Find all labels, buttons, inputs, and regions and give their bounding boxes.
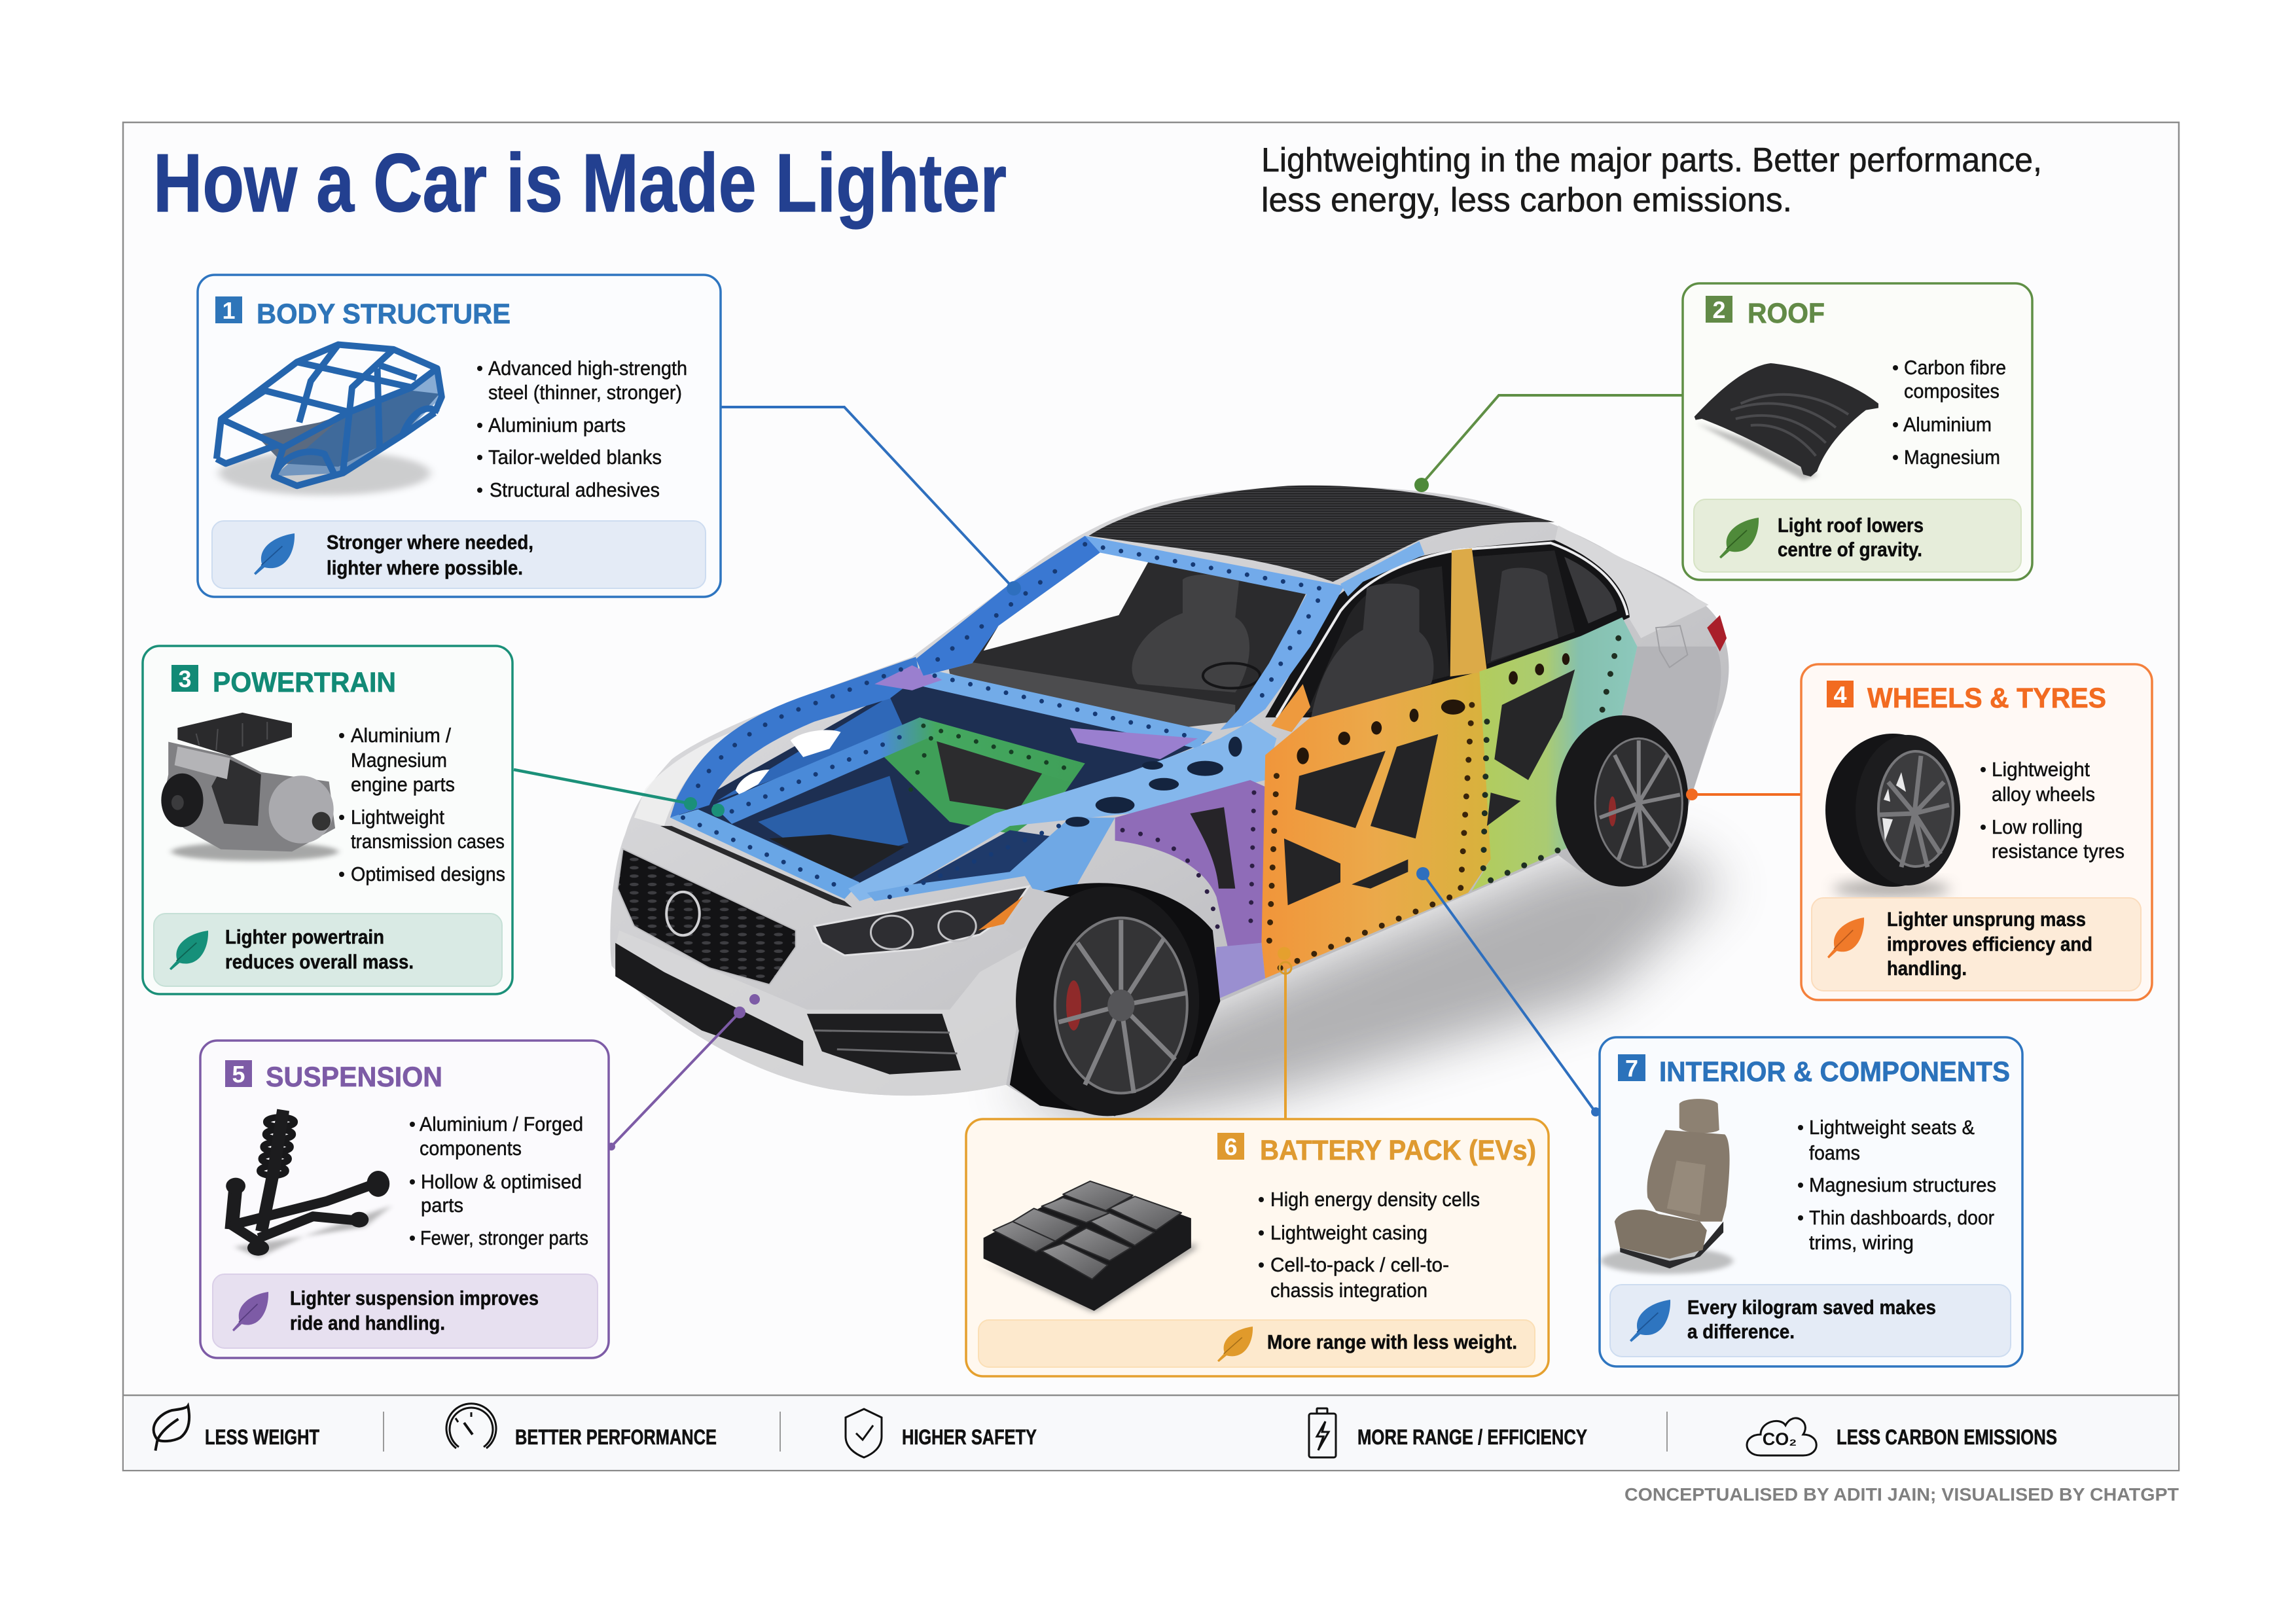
callout text: improves efficiency and [1887, 933, 2092, 955]
front crossmember [670, 810, 859, 899]
side intake [807, 1014, 961, 1075]
badge 6: 6 [1224, 1133, 1238, 1160]
rear quarter shade [1619, 647, 1721, 855]
seat centre panel [1667, 1160, 1706, 1215]
icon: roof panel [1695, 363, 1878, 480]
badge 6 [1217, 1133, 1244, 1160]
bullet list: Lightweight seats & [1809, 1116, 1975, 1139]
bullet list [1798, 1116, 1996, 1254]
badge 2 [1706, 296, 1732, 323]
bullet list [477, 357, 687, 501]
heading: BATTERY PACK (EVs) [1260, 1135, 1536, 1166]
rear door frame [1472, 617, 1637, 891]
bullet list: Aluminium / Forged [420, 1113, 583, 1135]
rear wheel [1556, 715, 1689, 887]
windshield frame [916, 536, 1344, 730]
rear door openings [1487, 669, 1575, 826]
dashboard [948, 661, 1235, 731]
icon: battery [1309, 1408, 1336, 1457]
label: LESS WEIGHT [205, 1425, 319, 1449]
callout text: Lighter unsprung mass [1887, 908, 2086, 931]
connector: wheels [1686, 789, 1801, 800]
label: BETTER PERFORMANCE [515, 1425, 717, 1449]
callout text: ride and handling. [290, 1311, 445, 1334]
icon: leaf [254, 533, 295, 575]
bullet list: Thin dashboards, door [1809, 1206, 1994, 1229]
heading: SUSPENSION [266, 1061, 442, 1093]
cylinder head highlights [175, 747, 230, 779]
bullet list: transmission cases [351, 830, 505, 853]
front fender edge [1006, 889, 1070, 951]
roof weave [1731, 395, 1848, 456]
structure holes [683, 544, 1619, 968]
bullet list: parts [421, 1194, 463, 1217]
strut rod [262, 1110, 283, 1232]
callout text [1778, 514, 1924, 561]
engine block [162, 742, 335, 851]
transmission hub [312, 812, 331, 830]
front tyre [1016, 887, 1199, 1116]
connector: powertrain [514, 770, 725, 817]
bullet list: Tailor-welded blanks [488, 446, 662, 469]
callout text: reduces overall mass. [225, 950, 414, 973]
callout text [1887, 908, 2092, 980]
lower bumper intake [615, 943, 803, 1066]
door beam holes [1297, 653, 1570, 764]
bullet list [1981, 758, 2125, 863]
headlight [814, 887, 1029, 955]
small damper [232, 1186, 236, 1230]
engine cover [177, 713, 292, 756]
green bay panel [882, 717, 1085, 834]
badge 7 [1618, 1054, 1645, 1082]
bullet list: Hollow & optimised [421, 1170, 582, 1193]
callout text: More range with less weight. [1267, 1330, 1517, 1353]
bullet list: Aluminium parts [488, 414, 626, 437]
bullet list: alloy wheels [1992, 783, 2095, 806]
seat shadow [1601, 1248, 1733, 1274]
bullet list: High energy density cells [1270, 1188, 1480, 1211]
frame struts [217, 345, 442, 486]
damper cap [226, 1178, 245, 1194]
purple pillar section [1115, 780, 1269, 947]
front bumper highlight [611, 931, 1032, 1096]
heading: ROOF [1748, 298, 1825, 329]
icon: CO2 cloud: CO₂ [1763, 1429, 1797, 1449]
icon: body frame [217, 345, 442, 495]
panel: roof [1683, 283, 2032, 580]
headlight amber strip [978, 896, 1024, 931]
callout strip [154, 914, 502, 986]
icon: suspension [226, 1110, 392, 1258]
right fender beam [848, 722, 1276, 901]
panel frame [200, 1041, 609, 1358]
callout strip [1610, 1285, 2011, 1357]
callout strip [978, 1320, 1535, 1367]
hood shut line [660, 826, 852, 908]
bullet list: Low rolling [1992, 815, 2083, 838]
control arm [232, 1182, 381, 1242]
pulley hub [171, 795, 184, 810]
callout text: Light roof lowers [1778, 514, 1924, 537]
suspension shadow [234, 1205, 392, 1258]
spokes [1880, 756, 1949, 867]
rim gaps [1882, 772, 1906, 841]
title: How a Car is Made Lighter [153, 137, 1007, 229]
rear door holes [1483, 638, 1619, 880]
callout strip [212, 521, 706, 588]
panel: powertrain [143, 646, 512, 994]
bay opening 2 [736, 770, 770, 794]
grille [618, 849, 796, 984]
icon: seat [1601, 1099, 1733, 1274]
arm bush [350, 1212, 368, 1228]
bullet list: Structural adhesives [490, 478, 660, 501]
battery base [984, 1181, 1191, 1311]
footer divider 2 [780, 1412, 781, 1452]
rear caliper [1609, 796, 1616, 827]
icon: leaf [1827, 918, 1864, 958]
panel: interior and components [1600, 1037, 2022, 1366]
frame floor [256, 391, 439, 467]
cabin interior [965, 552, 1306, 726]
footer item: more range [1309, 1408, 1587, 1457]
panel frame [198, 275, 721, 597]
bullet list: Lightweight [1992, 758, 2090, 781]
brake caliper [1066, 980, 1081, 1031]
dark door gasket [1265, 540, 1630, 717]
door holes [1269, 705, 1472, 968]
bullet list: Lightweight casing [1270, 1221, 1427, 1244]
badge 5: 5 [232, 1061, 245, 1088]
callout text: centre of gravity. [1778, 538, 1922, 561]
bullet list: Aluminium / [351, 724, 451, 747]
spring coils [260, 1117, 295, 1175]
engine mid shadow [211, 758, 261, 826]
car body [610, 486, 1729, 1116]
fender shine [634, 732, 732, 826]
bullet list [339, 724, 505, 885]
bullet list: Lightweight [351, 806, 444, 829]
roof shell [1695, 363, 1878, 476]
front side window [1306, 566, 1449, 713]
callout text: lighter where possible. [327, 556, 523, 579]
quarter glass [1564, 557, 1617, 624]
icon: CO2 cloud [1747, 1418, 1816, 1455]
callout text: Lighter suspension improves [290, 1287, 539, 1310]
callout strip [213, 1274, 598, 1348]
purple holes [1122, 793, 1254, 943]
credit line: CONCEPTUALISED BY ADITI JAIN; VISUALISED BY CHATGPT [1624, 1484, 2179, 1505]
bullet list: chassis integration [1270, 1279, 1427, 1302]
transmission case [269, 776, 334, 844]
callout text [327, 531, 533, 579]
badge 4: 4 [1833, 681, 1847, 708]
left bay blue panel [717, 696, 905, 801]
rear spokes [1600, 740, 1680, 866]
bay strut [713, 717, 1085, 824]
bullet list: composites [1904, 380, 2000, 402]
window trim [1276, 543, 1628, 717]
carbon roof [1088, 486, 1554, 582]
frame shadow [219, 451, 430, 495]
intake slats [814, 1031, 958, 1054]
footer item: better performance [446, 1404, 717, 1449]
front rim [1055, 918, 1187, 1093]
bullet list: trims, wiring [1809, 1231, 1914, 1254]
orange front door frame [1261, 671, 1491, 978]
icon: outline leaf [154, 1406, 189, 1451]
connector: interior [1416, 867, 1600, 1116]
A-pillar saturated [916, 536, 1100, 676]
subtitle: Lightweighting in the major parts. Better performance, [1261, 141, 2042, 179]
seat cushion [1615, 1209, 1707, 1258]
panel frame [1683, 283, 2032, 580]
icon: leaf [1630, 1300, 1670, 1342]
seat back [1647, 1130, 1730, 1222]
large lightening holes [1066, 737, 1242, 827]
callout text: Stronger where needed, [327, 531, 533, 554]
panel: battery pack [966, 1119, 1549, 1376]
headlight lenses [870, 911, 976, 949]
rear deck highlight [1554, 526, 1709, 638]
callout text: handling. [1887, 957, 1967, 980]
icon: wheel [1825, 734, 1960, 897]
fuel flap [1656, 626, 1687, 668]
tyre tread [1825, 734, 1960, 887]
icon: leaf [232, 1292, 268, 1331]
bullet list [410, 1113, 588, 1249]
lower bay dark parts [770, 834, 905, 880]
bullet list: steel (thinner, stronger) [488, 381, 682, 404]
lower fender section [867, 817, 1115, 901]
bullet list: foams [1809, 1141, 1860, 1164]
bullet list [1259, 1188, 1480, 1302]
rear side window [1472, 550, 1575, 664]
badge 1: 1 [222, 297, 236, 324]
tail light [1707, 615, 1727, 652]
rear seat [1491, 568, 1558, 661]
icon: battery pack [984, 1181, 1195, 1313]
badge 4 [1827, 681, 1854, 708]
roof shadow [1697, 423, 1818, 480]
icon: engine [161, 713, 338, 861]
bullet list: Magnesium [1904, 446, 2000, 469]
right lower bay panel [912, 830, 1066, 884]
cowl purple section [874, 666, 1198, 759]
car illustration [610, 486, 1729, 1126]
badge 1 [215, 296, 242, 324]
icon: leaf [170, 931, 208, 970]
connector: body structure [721, 407, 1021, 596]
bullet list: Magnesium structures [1809, 1173, 1996, 1196]
footer item: less carbon [1747, 1418, 2057, 1455]
callout strip [1694, 499, 2021, 572]
front seats [1132, 575, 1249, 692]
callout text: a difference. [1687, 1320, 1795, 1343]
panel frame [1801, 664, 2152, 1000]
front wheel arch [1010, 883, 1220, 1116]
connector: battery [1278, 947, 1291, 1119]
callout text: Every kilogram saved makes [1687, 1296, 1936, 1319]
callout strip [1812, 898, 2141, 991]
label: MORE RANGE / EFFICIENCY [1357, 1425, 1587, 1449]
left fender beam [670, 657, 920, 817]
callout text [290, 1287, 539, 1334]
footer divider 3 [1666, 1412, 1668, 1452]
main frame [123, 122, 2179, 1471]
engine bay [675, 680, 1205, 889]
icon: leaf [1719, 518, 1759, 558]
label: HIGHER SAFETY [902, 1425, 1037, 1449]
purple section opening [1190, 807, 1235, 889]
front wheel [1016, 887, 1199, 1116]
callout text: Lighter powertrain [225, 925, 384, 948]
panel: wheels and tyres [1801, 664, 2152, 1000]
bullet list: components [420, 1137, 522, 1160]
front spokes [1059, 920, 1187, 1093]
blue holes [683, 544, 1329, 897]
seat rails [1620, 1222, 1723, 1268]
panel frame [143, 646, 512, 994]
panel frame [1600, 1037, 2022, 1366]
orange pillar front [1271, 684, 1310, 732]
ball joint [247, 1240, 269, 1256]
battery shadow [986, 1241, 1195, 1313]
bullet list: Carbon fibre [1904, 356, 2006, 379]
grille logo [666, 892, 700, 935]
heading: BODY STRUCTURE [257, 298, 511, 330]
callout text [225, 925, 414, 973]
bullet list: Aluminium [1903, 413, 1992, 436]
icon: leaf [1217, 1327, 1253, 1362]
cowl beam [912, 668, 1213, 749]
orange window pillar [1450, 548, 1487, 677]
badge 3 [171, 665, 198, 692]
bullet list [1893, 356, 2006, 469]
bay openings [791, 730, 841, 757]
connector: suspension [607, 994, 760, 1150]
engine block [935, 732, 1047, 812]
footer divider 1 [383, 1412, 384, 1452]
badge 7: 7 [1625, 1055, 1638, 1082]
frame side fill [274, 368, 442, 476]
bullet list: engine parts [351, 773, 455, 796]
alloy rim [1878, 751, 1953, 866]
icon: shield [846, 1409, 882, 1457]
steering wheel [1203, 663, 1260, 688]
cover seams [196, 722, 267, 750]
wheel shadow [1833, 881, 1950, 897]
green holes [905, 726, 1077, 805]
roof rail section [1340, 541, 1425, 596]
seat headrest [1679, 1099, 1719, 1133]
lower bay blue panel [758, 776, 908, 868]
panel: suspension [200, 1041, 609, 1358]
rear tyre [1556, 715, 1689, 887]
battery cells [993, 1181, 1181, 1279]
badge 5 [225, 1060, 252, 1088]
bullet list: Fewer, stronger parts [420, 1226, 588, 1249]
heading: WHEELS & TYRES [1867, 683, 2106, 714]
rear rim [1595, 738, 1682, 868]
bullet list: resistance tyres [1992, 840, 2125, 863]
bullet list: Magnesium [351, 749, 447, 772]
footer item: higher safety [846, 1409, 1037, 1457]
badge 3: 3 [178, 666, 192, 692]
car ground shadow [1010, 847, 1716, 1126]
badge 2: 2 [1712, 296, 1726, 323]
connector: roof [1414, 395, 1683, 492]
subtitle: less energy, less carbon emissions. [1261, 181, 1792, 219]
label: LESS CARBON EMISSIONS [1837, 1425, 2057, 1449]
heading: POWERTRAIN [213, 667, 396, 698]
pulley [161, 774, 204, 827]
windshield glass [984, 552, 1149, 651]
callout text [1687, 1296, 1936, 1343]
door openings [1284, 734, 1438, 905]
front door seat [1310, 584, 1433, 722]
bullet list: Optimised designs [351, 863, 505, 885]
panel frame [966, 1119, 1549, 1376]
bullet list: Cell-to-pack / cell-to- [1270, 1253, 1449, 1276]
front hub [1107, 990, 1134, 1022]
lower purple sill [1213, 943, 1265, 1001]
footer band background [124, 1395, 2178, 1470]
engine shadow [171, 842, 338, 861]
tyre sidewall [1856, 735, 1960, 885]
footer item: less weight [154, 1406, 319, 1451]
icon: gauge [446, 1404, 496, 1448]
arm end [367, 1171, 389, 1197]
heading: INTERIOR & COMPONENTS [1659, 1056, 2010, 1088]
bullet list: Advanced high-strength [488, 357, 687, 380]
panel: body structure [198, 275, 721, 597]
